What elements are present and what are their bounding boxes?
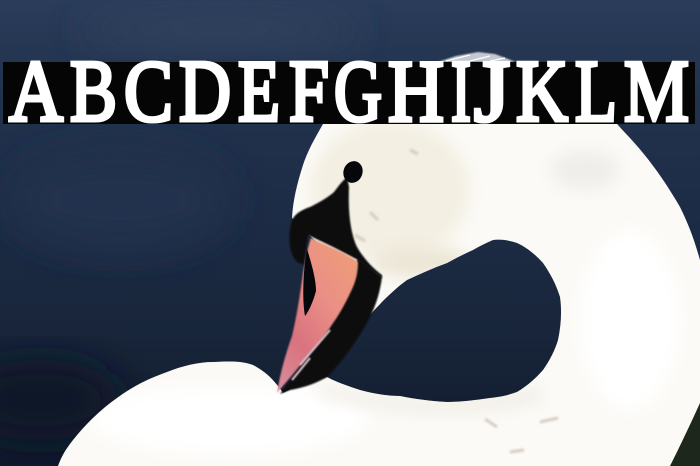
letter L: L <box>575 44 617 140</box>
nostril <box>303 249 316 316</box>
letter F: F <box>289 44 329 140</box>
letter J: J <box>474 44 510 140</box>
letter K: K <box>516 44 568 140</box>
letter C: C <box>124 44 173 140</box>
swan face mask <box>289 177 382 278</box>
letter I: I <box>451 44 471 140</box>
letter G: G <box>334 44 382 140</box>
swan body and neck <box>50 120 700 466</box>
letter H: H <box>388 44 444 140</box>
letter D: D <box>179 44 231 140</box>
swan beak, pink upper <box>277 238 358 393</box>
swan beak, black lower edge <box>280 258 382 394</box>
feathers above banner <box>438 52 516 62</box>
letter E: E <box>238 44 280 140</box>
letter B: B <box>70 44 117 140</box>
letter A: A <box>9 44 63 140</box>
letter M: M <box>624 44 689 140</box>
eye <box>340 158 366 186</box>
dark foliage corner <box>668 400 700 466</box>
beak highlight <box>292 330 330 380</box>
banner <box>3 44 695 140</box>
